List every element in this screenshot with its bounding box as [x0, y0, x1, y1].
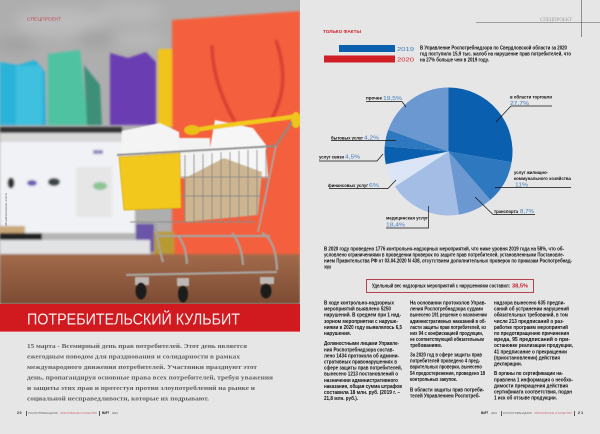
pie label: transport: 8,7%: [520, 209, 534, 215]
column 2: ласти защиты прав потребителей, из: [410, 324, 486, 331]
column 3: остановке реализации продукции,: [494, 343, 574, 349]
column 3: по предотвращению причинения: [494, 331, 569, 337]
column 3: числе 213 предписаний о раз-: [494, 318, 564, 325]
pie label: medical: медицинская услуг: [386, 216, 428, 220]
column 3: сертификата соответствия, подан: [494, 388, 572, 396]
column 3: работке программ мероприятий: [494, 324, 568, 331]
title band: [0, 304, 300, 332]
pie label: transport: транспорта: [494, 209, 518, 214]
complaints text: на 27% больше чем в 2019 году.: [420, 56, 489, 64]
column 2: 54 предостережения, проведено 18: [410, 371, 485, 377]
column 1: зорном мероприятии с наруше-: [324, 319, 398, 325]
callout box: [366, 280, 534, 292]
pie label: communications: услуг связи: [319, 154, 344, 160]
pie label: housing: [514, 170, 571, 188]
complaints text: В Управление Роспотребнадзора по Свердловской области за 2020: [420, 44, 567, 52]
pie label: other: 19,5%: [383, 96, 402, 102]
bar comparison 2019 / 2020: 2019: [397, 47, 414, 53]
right page footer: РОСПОТРЕБНАДЗОР: [503, 411, 532, 415]
intro text: [27, 343, 273, 402]
callout box: Удельный вес надзорных мероприятий с нарушениями составил:: [372, 282, 510, 290]
left page footer: 20: [17, 411, 22, 415]
pie label: housing: 11%: [515, 182, 528, 188]
column 1: наказания, общая сумма штрафов: [324, 383, 402, 390]
column 2: административных наказаний в об-: [410, 318, 486, 325]
column 2: На основании протоколов Управ-: [410, 300, 486, 306]
pie label: communications: 4,5%: [345, 154, 360, 160]
title: ПОТРЕБИТЕЛЬСКИЙ КУЛЬБИТ: [27, 310, 240, 328]
column 3: вреда, 95 предписаний о при-: [494, 336, 570, 343]
column 2: В области защиты прав потреби-: [410, 386, 484, 394]
inspections paragraph: В 2020 году проведено 1776 контрольно-надзорных мероприятий, что ниже уровня 2019 года на 58%, что об-: [324, 246, 564, 252]
column 1: назначении административного: [324, 378, 398, 384]
column 1: составила 18 млн. руб. (2019 г. –: [324, 389, 400, 396]
pie label: trade: в области торговли: [510, 94, 552, 100]
pie label: financial: 6%: [369, 183, 379, 189]
column 1: нарушений. В среднем при 1 над-: [324, 312, 401, 319]
column 1: нарушения.: [324, 331, 352, 337]
pie chart: [384, 88, 513, 215]
column 1: В ходе контрольно-надзорных: [324, 300, 394, 306]
callout box: 38,5%: [512, 284, 529, 290]
column 2: требованиям.: [410, 342, 443, 349]
column 2: контрольных закупок.: [410, 377, 457, 383]
pie label: communications: [319, 154, 360, 160]
right section heading with corner rule: [476, 0, 600, 37]
column 2: них 94 с конфискацией продукции,: [410, 330, 483, 337]
column 2: телей Управлением Роспотреб-: [410, 393, 480, 400]
bar comparison 2019 / 2020: 2020: [397, 58, 414, 64]
intro text: социальной несправедливости, которые их подрывают.: [27, 396, 209, 402]
column 3: надзора вынесено 635 предпи-: [494, 300, 565, 306]
column 1: ниями в 2020 году выявлялось 6,5: [324, 325, 402, 331]
pie label: medical: [386, 216, 428, 228]
column 2: варительных проверки, вынесено: [410, 365, 482, 371]
column 1: сфере защиты прав потребителей,: [324, 365, 403, 372]
left page footer: ОБРАЗОВАНИЕ И КАЧЕСТВО: [60, 411, 98, 415]
pie label: housing: услуг жилищно-: [514, 170, 548, 175]
photo: shopping cart and bags: [0, 0, 301, 304]
column 3: 41 предписание о прекращении: [494, 349, 567, 355]
inspections paragraph: [324, 246, 572, 270]
left page footer: [17, 411, 118, 416]
left page footer: 2021: [112, 411, 118, 415]
pie label: transport: [494, 209, 534, 215]
photo credit: shutterstock.com: [4, 192, 8, 226]
right page footer: 2021: [491, 411, 497, 415]
intro text: 15 марта - Всемирный день прав потребителей. Этот день является: [27, 343, 247, 350]
intro text: и защиты этих прав и протестуя против злоупотреблений на рынке и: [27, 385, 255, 392]
cart contents: [117, 112, 301, 302]
right page footer: 21: [578, 411, 583, 415]
intro text: ежегодным поводом для празднования и солидарности в рамках: [27, 354, 241, 360]
pie label: medical: 18,4%: [386, 222, 405, 228]
column 1: вынесено 1213 постановлений о: [324, 371, 398, 378]
intro text: международного движения потребителей. Участники празднуют этот: [27, 364, 258, 371]
column 3: декларации.: [494, 362, 523, 368]
column 2: не соответствующей обязательным: [410, 336, 484, 343]
complaints text: год поступило 15,9 тыс. жалоб на нарушение прав потребителей, что: [420, 50, 571, 58]
right page footer: [481, 411, 583, 416]
column 2: За 2020 год в сфере защиты прав: [410, 352, 482, 358]
facts heading: ТОЛЬКО ФАКТЫ: [323, 29, 361, 34]
pie label: household services: [331, 134, 379, 142]
column 1: стративных правонарушениях в: [324, 360, 397, 366]
column 3: [494, 300, 574, 402]
pie label: other: [366, 96, 402, 102]
column 2: потребителей проведено 4 пред-: [410, 358, 480, 365]
inspections paragraph: зора: [324, 264, 331, 270]
column 3: (приостановлении) действия: [494, 354, 560, 361]
column 1: 21,8 млн. руб.).: [324, 395, 359, 402]
pie label: financial: финансовых услуг: [328, 182, 368, 188]
column 3: димости прекращения действия: [494, 382, 568, 389]
column 3: правлена 1 информация о необхо-: [494, 376, 573, 383]
intro text: день, пропагандируя основные права всех потребителей, требуя уважения: [27, 374, 273, 382]
column 2: вынесено 191 решение о назначении: [410, 313, 487, 319]
column 3: обязательных требований, в том: [494, 312, 568, 319]
column 1: [324, 300, 403, 402]
column 2: [410, 300, 487, 400]
column 1: Должностными лицами Управле-: [324, 341, 399, 347]
right section heading with corner rule: СПЕЦПРОЕКТ: [540, 18, 572, 23]
pie label: other: прочее: [366, 96, 382, 100]
column 1: лено 1434 протокола об админи-: [324, 352, 399, 359]
right page footer: МАРТ: [481, 411, 489, 415]
column 1: ния Роспотребнадзора состав-: [324, 346, 394, 353]
column 3: В органы по сертификации на-: [494, 370, 563, 377]
pie label: household services: 4,2%: [364, 136, 379, 142]
pie label: housing: коммунального хозяйства: [514, 175, 571, 181]
left page footer: МАРТ: [102, 411, 110, 415]
column 2: ления Роспотребнадзора судами: [410, 306, 483, 313]
right page footer: ОБРАЗОВАНИЕ И КАЧЕСТВО: [534, 411, 573, 415]
label: left section heading: СПЕЦПРОЕКТ: [27, 16, 61, 22]
column 1: мероприятий выявлено 5250: [324, 306, 391, 313]
complaints text: [420, 44, 571, 64]
left page footer: РОСПОТРЕБНАДЗОР: [28, 411, 58, 415]
pie label: financial: [328, 182, 379, 189]
pie label: trade: [510, 94, 552, 107]
column 3: 1 иск об отзыве продукции.: [494, 395, 558, 402]
pie leader lines: [319, 102, 571, 228]
column 3: саний об устранении нарушений: [494, 306, 569, 313]
bar comparison 2019 / 2020: [324, 45, 414, 64]
pie label: household services: бытовых услуг: [331, 134, 363, 140]
pie label: trade: 27,7%: [510, 101, 529, 107]
